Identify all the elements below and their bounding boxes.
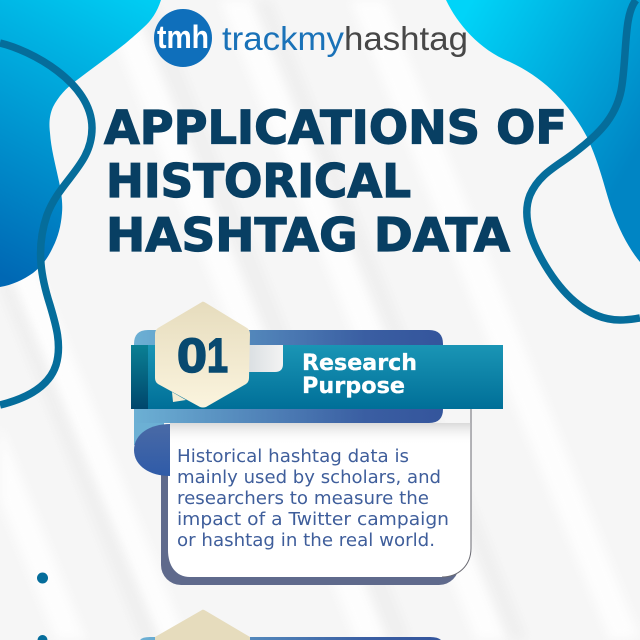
body text: Historical hashtag data is [177,446,409,467]
body text: or hashtag in the real world. [177,530,435,551]
blob: top right [446,0,640,262]
number 01: 1 [207,330,228,383]
scroll curl [134,424,170,476]
logo badge: tmh [157,19,209,55]
next header back plate [140,637,441,640]
header shadow [170,423,470,445]
curl light fold [134,415,164,445]
title [104,100,567,262]
title: APPLICATIONS OF [104,100,567,154]
card body [168,423,471,577]
curve line: left [0,43,92,405]
heading: research purpose [302,351,417,399]
number hexagon [155,302,250,408]
white tab [240,345,283,372]
ribbon fold [131,345,148,409]
body text: impact of a Twitter campaign [177,509,449,530]
hexagon tail [172,392,186,402]
number 01: 0 [177,330,207,383]
next number hexagon [155,610,250,640]
number 01 [177,330,228,383]
body text [177,446,449,551]
ribbon [131,345,503,409]
logo badge [154,9,212,67]
header back plate [134,330,443,423]
panel: next card top edge [140,610,441,640]
card back shadow plate [161,440,459,585]
body text: mainly used by scholars, and [177,467,441,488]
logo wordmark: trackmyhashtag [222,20,468,57]
panel: research purpose [131,302,503,585]
title: HASHTAG DATA [106,208,510,262]
card right edge line [442,409,471,577]
logo [154,9,468,67]
title: HISTORICAL [106,154,411,208]
curve line: right [527,0,640,320]
blob: top left [0,0,161,287]
heading: research purpose: Research [302,351,417,376]
heading: research purpose: Purpose [302,374,405,399]
dot: lower [38,635,48,640]
dot: upper [37,572,48,584]
body text: researchers to measure the [177,488,429,509]
